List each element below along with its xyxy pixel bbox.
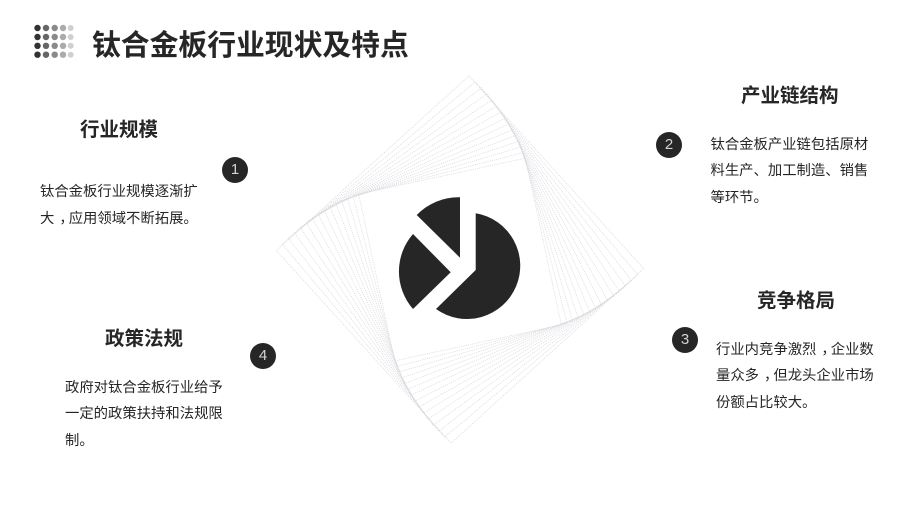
badge 1 (222, 157, 248, 183)
block 1: industry scale (40, 118, 248, 226)
text: 产业链结构 body: 等环节。 (710, 190, 768, 206)
badge 3 (672, 327, 698, 353)
heading: 行业规模: 行业规模 (80, 118, 158, 140)
text: 竞争格局 body (716, 342, 874, 410)
block 3: competition (672, 290, 874, 410)
text: 行业规模 body (40, 184, 198, 226)
text: 竞争格局 body: 份额占比较大。 (716, 394, 816, 410)
badge 3: 3 (681, 331, 689, 348)
badge 1: 1 (231, 161, 239, 178)
block 4: policy (65, 328, 276, 448)
text: 竞争格局 body: 行业内竞争激烈 ，企业数 (716, 342, 874, 358)
text: 政策法规 body: 制。 (65, 432, 94, 448)
text: 产业链结构 body: 钛合金板产业链包括原材 (710, 136, 868, 152)
text: 政策法规 body (65, 380, 223, 448)
heading: 竞争格局: 竞争格局 (757, 290, 835, 312)
text: 行业规模 body: 大 ，应用领域不断拓展。 (40, 210, 198, 226)
text: 行业规模 body: 钛合金板行业规模逐渐扩 (40, 184, 198, 200)
badge 4: 4 (259, 347, 267, 364)
text: 产业链结构 body (710, 136, 868, 206)
text: 产业链结构 body: 料生产、加工制造、销售 (710, 163, 868, 179)
badge 2 (656, 132, 682, 158)
heading: 政策法规: 政策法规 (105, 328, 183, 350)
text: 政策法规 body: 政府对钛合金板行业给予 (65, 380, 223, 396)
heading: 产业链结构: 产业链结构 (741, 84, 839, 106)
block 2: industry chain (656, 84, 868, 206)
text: 政策法规 body: 一定的政策扶持和法规限 (65, 406, 223, 422)
badge 4 (250, 343, 276, 369)
badge 2: 2 (665, 136, 673, 153)
text: 竞争格局 body: 量众多 ，但龙头企业市场 (716, 368, 874, 384)
title: 钛合金板行业现状及特点 (92, 30, 409, 62)
icon: dot grid (34, 24, 74, 58)
